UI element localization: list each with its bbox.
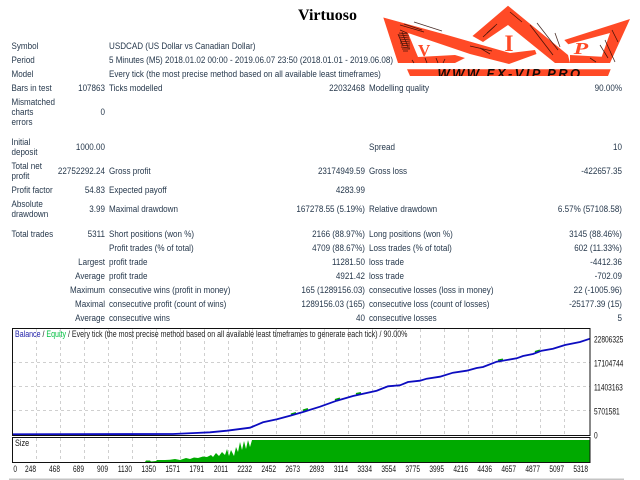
y axis labels: 0	[594, 431, 598, 441]
column 2 values: Average	[75, 270, 105, 281]
x axis labels: 689	[73, 464, 84, 474]
x axis labels: 2673	[285, 464, 300, 474]
column 6 values: 10	[613, 141, 622, 152]
column 6 values: -422657.35	[581, 165, 622, 176]
column 6 values: -702.09	[595, 270, 622, 281]
column 3 labels: Ticks modelled	[109, 82, 163, 93]
x axis labels: 5097	[549, 464, 564, 474]
column 3 labels: USDCAD (US Dollar vs Canadian Dollar)	[109, 40, 255, 51]
x axis labels: 468	[49, 464, 60, 474]
x axis labels: 3114	[334, 464, 349, 474]
settings labels: Absolute	[12, 198, 43, 209]
x axis labels: 3995	[429, 464, 444, 474]
column 2 values: 5311	[88, 228, 105, 239]
column 3 labels: Profit trades (% of total)	[109, 242, 194, 253]
x axis labels: 1130	[118, 464, 133, 474]
x axis labels: 1350	[141, 464, 157, 474]
title: Virtuoso	[298, 7, 357, 24]
x axis labels: 1571	[165, 464, 180, 474]
settings labels: Bars in test	[12, 82, 52, 93]
logo letters	[418, 31, 589, 60]
column 4 values: 1289156.03 (165)	[301, 298, 365, 309]
column 3 labels: profit trade	[109, 270, 148, 281]
column 6 values: 3145 (88.46%)	[569, 228, 622, 239]
column 3 labels: consecutive wins	[109, 312, 170, 323]
column 3 labels	[109, 40, 393, 323]
column 3 labels: Every tick (the most precise method based on all available least timeframes)	[109, 68, 381, 79]
settings labels: drawdown	[12, 208, 48, 219]
column 2 values: 54.83	[85, 184, 105, 195]
settings labels: Symbol	[12, 40, 38, 51]
column 4 values: 4283.99	[336, 184, 365, 195]
settings labels: charts	[12, 106, 34, 117]
column 4 values: 165 (1289156.03)	[301, 284, 365, 295]
column 2 values: 107863	[78, 82, 105, 93]
x axis labels: 4216	[453, 464, 468, 474]
balance line	[13, 339, 590, 434]
x axis labels: 0	[13, 464, 18, 474]
column 5 labels: Spread	[369, 141, 395, 152]
x axis labels: 4657	[501, 464, 516, 474]
x axis labels: 2893	[309, 464, 324, 474]
x axis labels: 3554	[381, 464, 397, 474]
settings labels: Model	[12, 68, 33, 79]
logo scratches	[398, 12, 618, 63]
x axis labels: 2452	[261, 464, 276, 474]
column 3 labels: Maximal drawdown	[109, 203, 178, 214]
column 3 labels: 5 Minutes (M5) 2018.01.02 00:00 - 2019.06.07 23:50 (2018.01.01 - 2019.06.08)	[109, 54, 393, 65]
equity line segments	[291, 350, 540, 414]
logo url: WWW.FX-VIP.PRO	[437, 66, 583, 81]
y axis labels: 5701581	[594, 407, 620, 417]
column 5 labels: Loss trades (% of total)	[369, 242, 452, 253]
column 3 labels: Gross profit	[109, 165, 151, 176]
y axis labels: 11403163	[594, 383, 623, 393]
size histogram	[12, 437, 590, 462]
column 4 values: 11281.50	[332, 256, 365, 267]
column 2 values: 22752292.24	[58, 165, 105, 176]
chart legend: Balance / Equity / Every tick (the most precise method based on all available least timeframes to generate each tick) / 90.00%	[15, 329, 408, 339]
settings labels: Total trades	[12, 228, 54, 239]
x axis labels: 2232	[237, 464, 252, 474]
settings labels: Initial	[12, 136, 30, 147]
size label: Size	[15, 437, 29, 448]
settings labels: Period	[12, 54, 35, 65]
column 6 values: -4412.36	[590, 256, 622, 267]
column 3 labels: Short positions (won %)	[109, 228, 194, 239]
x axis labels: 5318	[573, 464, 588, 474]
column 4 values: 23174949.59	[318, 165, 365, 176]
size bars	[145, 440, 590, 462]
logo letters: I	[505, 31, 514, 56]
x axis labels: 3334	[357, 464, 373, 474]
column 3 labels: profit trade	[109, 256, 148, 267]
y axis labels: 22806325	[594, 335, 623, 345]
y axis labels: 17104744	[594, 359, 624, 369]
column 2 values	[58, 82, 105, 323]
column 5 labels: loss trade	[369, 256, 404, 267]
column 2 values: 1000.00	[76, 141, 105, 152]
settings labels: deposit	[12, 146, 38, 157]
column 6 values: 22 (-1005.96)	[574, 284, 622, 295]
chart frame	[12, 328, 590, 436]
column 5 labels	[369, 82, 494, 323]
x axis labels: 1791	[189, 464, 204, 474]
column 3 labels: consecutive profit (count of wins)	[109, 298, 226, 309]
column 2 values: 3.99	[89, 203, 105, 214]
y axis labels	[594, 335, 624, 441]
column 4 values: 4921.42	[336, 270, 365, 281]
x axis labels: 909	[97, 464, 108, 474]
column 5 labels: Modelling quality	[369, 82, 430, 93]
column 6 values: 90.00%	[595, 82, 622, 93]
column 4 values: 167278.55 (5.19%)	[296, 203, 365, 214]
column 4 values: 2166 (88.97%)	[312, 228, 365, 239]
column 2 values: Maximal	[75, 298, 105, 309]
x axis labels: 4436	[477, 464, 492, 474]
column 5 labels: consecutive losses (loss in money)	[369, 284, 494, 295]
column 5 labels: Gross loss	[369, 165, 408, 176]
column 6 values: 5	[618, 312, 622, 323]
column 5 labels: consecutive loss (count of losses)	[369, 298, 490, 309]
settings labels: profit	[12, 170, 30, 181]
column 4 values	[296, 82, 365, 323]
settings labels: Profit factor	[12, 184, 53, 195]
x axis labels: 248	[25, 464, 36, 474]
column 3 labels: Expected payoff	[109, 184, 167, 195]
x axis labels: 4877	[525, 464, 540, 474]
column 5 labels: Relative drawdown	[369, 203, 437, 214]
column 6 values: 602 (11.33%)	[574, 242, 622, 253]
column 2 values: Average	[75, 312, 105, 323]
column 3 labels: consecutive wins (profit in money)	[109, 284, 230, 295]
settings labels: Mismatched	[12, 96, 55, 107]
x axis labels	[13, 464, 588, 474]
column 5 labels: Long positions (won %)	[369, 228, 453, 239]
logo letters: V	[418, 41, 431, 60]
settings labels: Total net	[12, 160, 42, 171]
column 2 values: 0	[101, 106, 105, 117]
column 2 values: Maximum	[70, 284, 105, 295]
column 4 values: 40	[356, 312, 365, 323]
x axis labels: 3775	[405, 464, 420, 474]
column 5 labels: consecutive losses	[369, 312, 437, 323]
x axis labels: 2011	[214, 464, 228, 474]
column 6 values	[558, 82, 622, 323]
column 2 values: Largest	[78, 256, 105, 267]
settings labels	[12, 40, 55, 239]
settings labels: errors	[12, 116, 33, 127]
column 5 labels: loss trade	[369, 270, 404, 281]
balance and equity chart	[12, 328, 624, 441]
logo letters: P	[572, 40, 589, 58]
column 4 values: 22032468	[329, 82, 365, 93]
column 6 values: 6.57% (57108.58)	[558, 203, 622, 214]
histogram frame	[12, 438, 590, 462]
column 4 values: 4709 (88.67%)	[312, 242, 365, 253]
logo: red crown	[383, 6, 630, 81]
column 6 values: -25177.39 (15)	[569, 298, 622, 309]
